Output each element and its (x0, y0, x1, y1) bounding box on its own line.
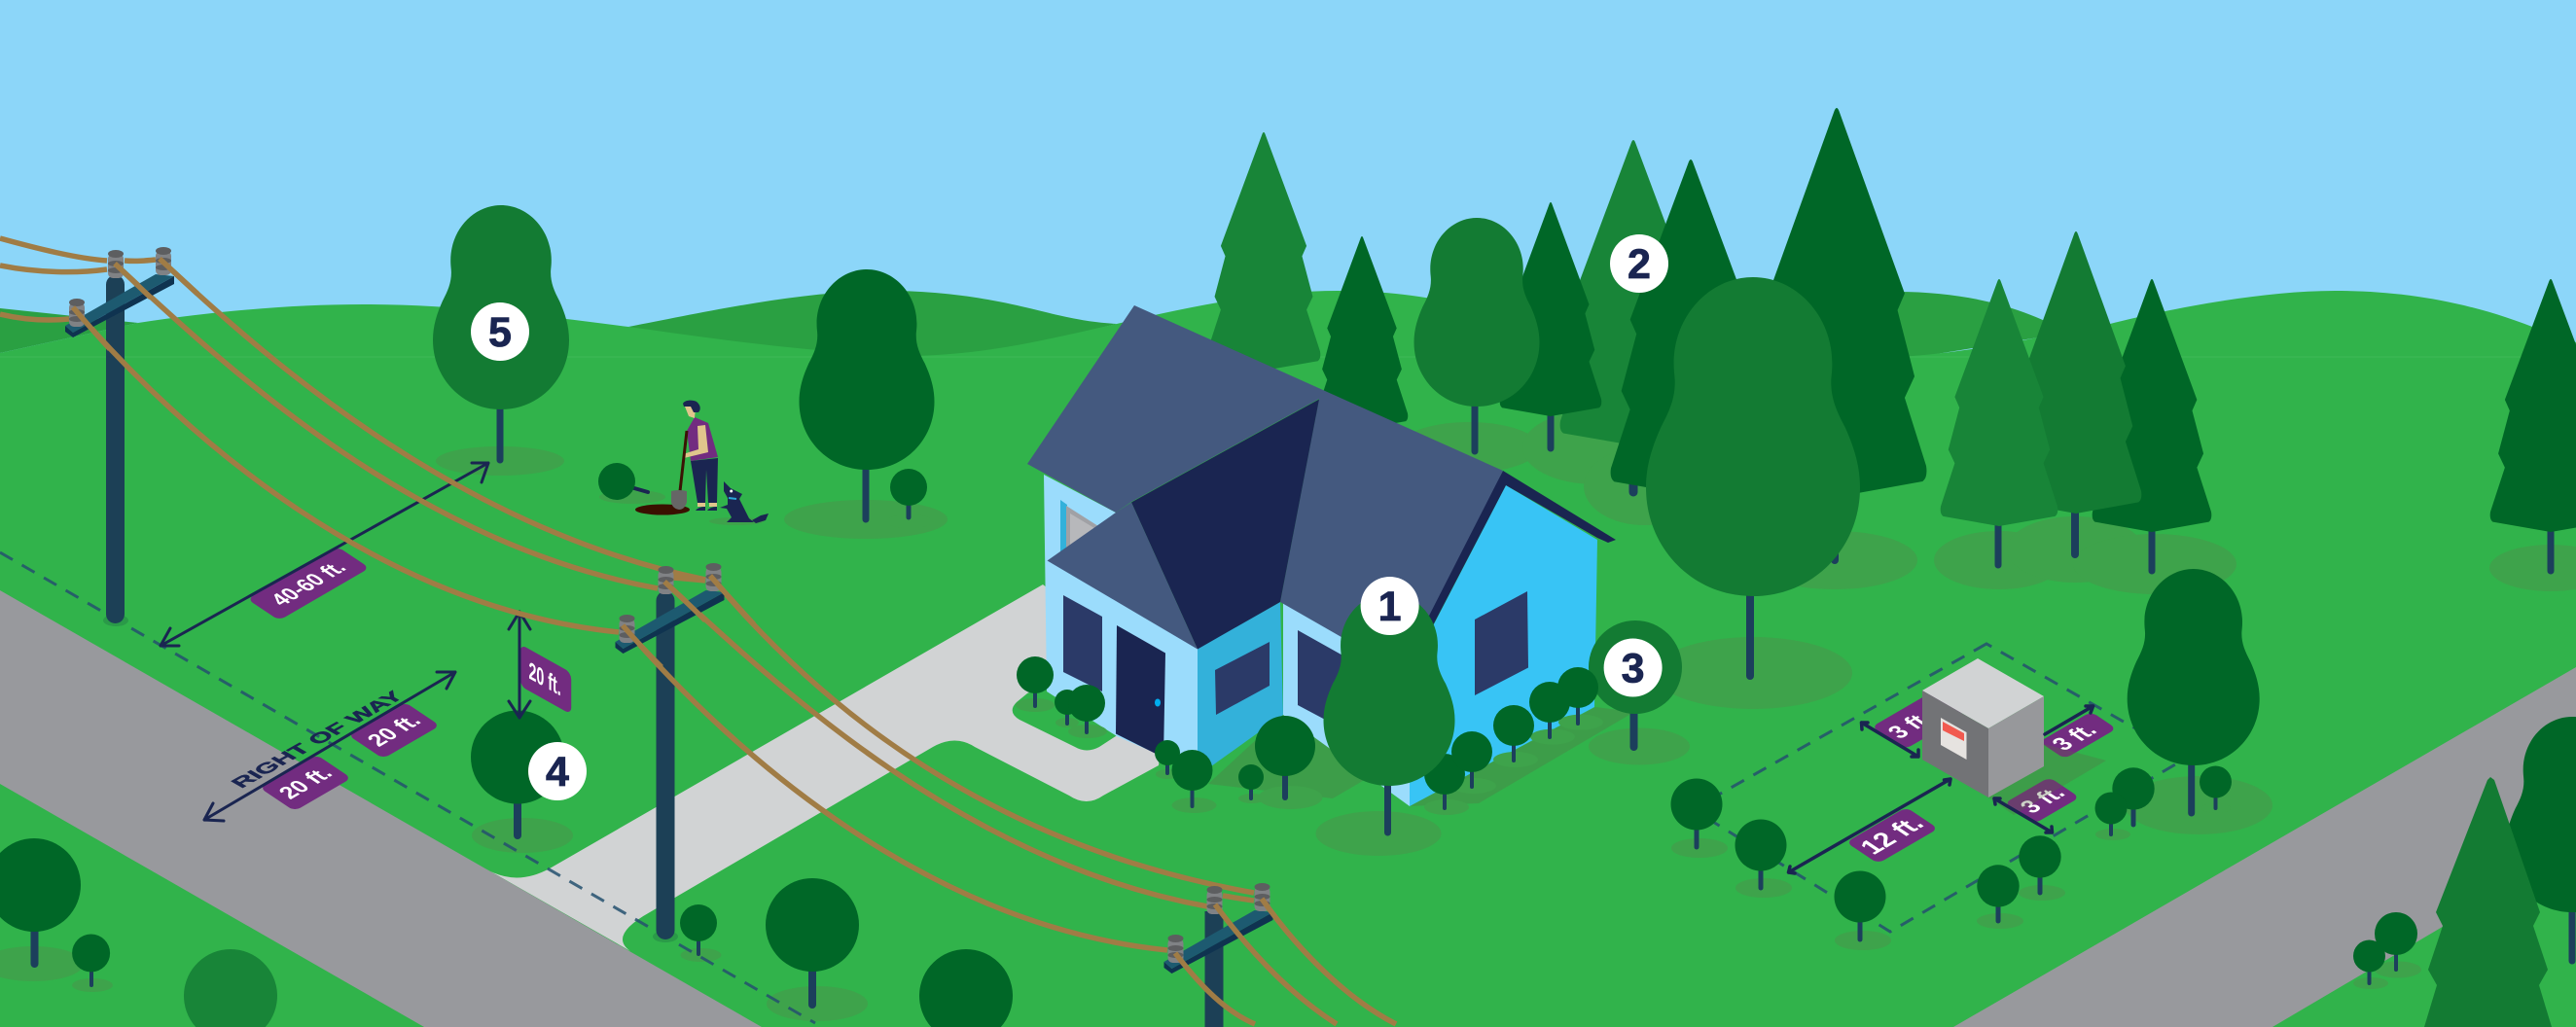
label: 12 ft: 12 ft. (1853, 812, 1930, 859)
badge: number 4: 4 (546, 749, 569, 796)
label: 20 ft upper (348, 702, 440, 759)
label: 20 ft upper: 20 ft. (362, 711, 427, 751)
back pine: dark behind round tree (1500, 202, 1601, 448)
house ground shadows (1208, 707, 1634, 806)
tree: bottom round cut off (919, 949, 1013, 1027)
attic window (1060, 500, 1109, 569)
window: right wall (1475, 591, 1528, 695)
badge: number 2 (1610, 234, 1668, 293)
label: 3 ft right (2039, 712, 2117, 759)
transformer shadow (1988, 744, 2106, 815)
transformer zone (1693, 644, 2187, 932)
arrow: vertical clearance (509, 612, 530, 718)
trees: lower right verge (2353, 912, 2421, 989)
left porch roof (1047, 502, 1198, 650)
label: 40-60 ft (247, 547, 370, 620)
gable (1131, 399, 1319, 650)
uprooted sapling (598, 463, 665, 504)
door (1116, 625, 1165, 758)
label: 3 ft bottom (2004, 777, 2080, 824)
back pine: light tall with trunk (1560, 140, 1706, 492)
background: grass (0, 291, 2576, 1027)
roof trim (1401, 471, 1616, 661)
walkway and driveway (485, 584, 1167, 951)
label: 3 ft right: 3 ft. (2047, 720, 2103, 755)
back pine: light far left (1207, 132, 1320, 371)
label: 20 ft lower (260, 755, 351, 811)
label: 3 ft left (1872, 691, 1965, 750)
tree: mature tree with number 5 (433, 205, 569, 476)
right wall (1410, 485, 1597, 806)
dashed line: right of way boundary (0, 552, 815, 1023)
tree: bottom faded round canopy (184, 949, 277, 1027)
main roof (1027, 305, 1503, 671)
pole crossarm two (615, 563, 724, 654)
label: 20 ft lower: 20 ft. (273, 763, 339, 803)
planting hole (635, 504, 690, 515)
pole one (103, 275, 128, 626)
heading: right of way: RIGHT OF WAY (227, 689, 410, 791)
badge: number 4 (528, 742, 587, 800)
window: front left (1063, 595, 1102, 691)
window: side wing (1298, 630, 1362, 739)
tree: bottom left small (72, 934, 113, 992)
label: 20 ft clearance (520, 644, 571, 715)
tree: large tree beside house (1646, 277, 1860, 676)
pole three (1204, 911, 1224, 1027)
tree: round tree number 4 (471, 710, 573, 853)
pole crossarm one (65, 247, 174, 337)
label: 20 ft clearance: 20 ft. (529, 656, 561, 702)
pine: lower right foreground (2424, 777, 2552, 1027)
pine cluster right: medium (2011, 231, 2141, 554)
label: 40-60 ft: 40-60 ft. (266, 557, 352, 610)
shrub canopies (1017, 656, 1315, 791)
right road (1953, 667, 2576, 1027)
badge: number 5 (471, 302, 529, 361)
grass island by door (1013, 671, 1119, 751)
far right pine (2490, 279, 2576, 571)
tree: dark tree beside digger (784, 269, 948, 539)
label: 3 ft bottom: 3 ft. (2015, 783, 2071, 817)
tree: far lower right large (2506, 717, 2576, 961)
badge: number 1 (1361, 577, 1419, 635)
arrow: 40-60 ft distance (161, 463, 488, 646)
person (671, 401, 718, 511)
incoming power lines ending at insulators (0, 238, 1254, 950)
background: far hills (0, 291, 2110, 358)
shrubs along right wall (1424, 667, 1598, 795)
badge: number 2: 2 (1628, 241, 1651, 288)
pine cluster right: light (1941, 279, 2057, 565)
outgoing power lines starting at insulators (73, 259, 1396, 1024)
arrow: right of way width (204, 672, 455, 821)
badge: number 3 (1604, 638, 1663, 696)
label: 3 ft left: 3 ft. (1882, 708, 1939, 743)
tree: number 1 in front of house (1315, 593, 1455, 856)
shrub trunks (1035, 691, 1578, 808)
arrow: 3 ft right (2045, 706, 2093, 734)
ground shadows of back trees (1399, 410, 2576, 709)
transformer box (1922, 658, 2044, 797)
side wing wall (1283, 602, 1410, 806)
utility poles (103, 275, 1224, 1027)
shrubs around house (1016, 656, 1603, 815)
tree: walkway-side small (680, 904, 722, 962)
arrow: 3 ft bottom (1994, 798, 2053, 832)
trees around transformer (1671, 569, 2272, 950)
back pine: dark tall beside number 2 (1611, 159, 1771, 495)
dog (709, 481, 769, 525)
small tree beside dark tree (886, 469, 933, 528)
house (1027, 305, 1634, 806)
back pine: tallest dark with trunk (1747, 108, 1926, 560)
recess panel (1198, 602, 1283, 776)
tree: number 3 small tree (1589, 620, 1690, 764)
badge: number 1: 1 (1378, 584, 1402, 630)
figure: person digging with shovel and dog (598, 401, 769, 525)
badge: number 5: 5 (488, 309, 512, 356)
back pine: dark small (1316, 236, 1408, 429)
arrow: 3 ft left (1862, 723, 1918, 757)
pine cluster right: dark (2093, 279, 2211, 571)
tree: medium tree behind house (1414, 218, 1539, 451)
pole two (653, 591, 678, 942)
tree: bottom left round (0, 838, 84, 981)
arrow: 12 ft (1788, 779, 1950, 873)
window: recess (1215, 642, 1270, 715)
pole crossarm three (1163, 883, 1272, 974)
dashed clearance zone (1693, 644, 2187, 932)
tree: front lawn round (766, 878, 868, 1021)
left road (0, 590, 762, 1027)
badge: number 3: 3 (1622, 646, 1645, 692)
shrub shadows (1016, 698, 1603, 815)
front wall (1044, 475, 1198, 776)
